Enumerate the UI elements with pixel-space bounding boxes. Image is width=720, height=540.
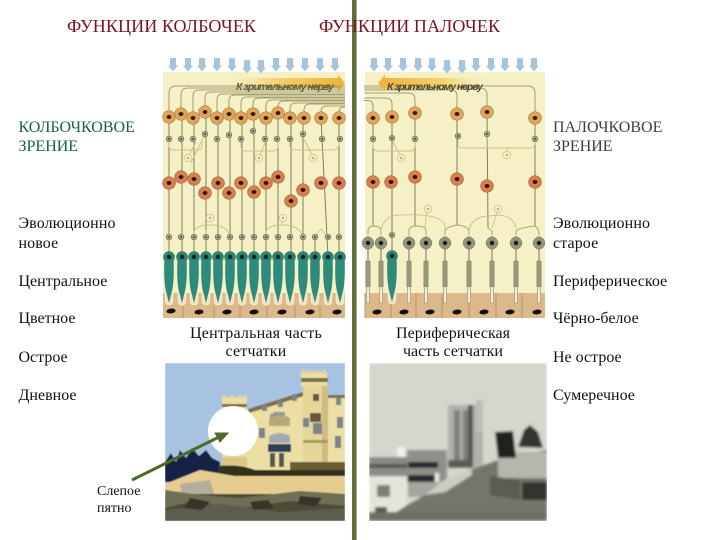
arrow: to optic nerve (cones): [225, 74, 345, 93]
photo: blurred monochrome periphery: [369, 363, 547, 521]
small amacrine cells row: cones: [166, 128, 343, 222]
text block: rod vision properties: Чёрно-белое: [553, 310, 639, 327]
ganglion cells: cones: [162, 106, 346, 124]
nerve fibres: cones: [169, 86, 345, 118]
amacrine links: rods: [373, 135, 535, 230]
text block: cone vision properties: Острое: [18, 349, 68, 366]
amacrine links: cones: [169, 134, 339, 237]
cone photoreceptors: [163, 251, 346, 305]
text block: cone vision properties: новое: [18, 234, 58, 252]
pigment epithelium: rods: [365, 293, 545, 318]
title: cones: ФУНКЦИИ КОЛБОЧЕК: [67, 16, 256, 36]
vertical axons: cones: [169, 112, 339, 257]
rod photoreceptors: [362, 236, 545, 304]
label: blind spot: пятно: [97, 501, 132, 516]
retina diagrams and photographs: [131, 0, 547, 540]
text block: cone vision properties: [18, 215, 116, 404]
arrow: to optic nerve (cones): К зрительному нерву: [236, 81, 335, 93]
caption: peripheral retina: часть сетчатки: [403, 343, 503, 360]
caption: peripheral retina: Периферическая: [396, 324, 510, 342]
text block: cone vision properties: Центральное: [18, 273, 107, 290]
text block: rod vision heading: [553, 119, 662, 155]
lower synapse row: cones: [166, 234, 342, 240]
rod bipolar branches: [368, 225, 539, 235]
label: blind spot: [97, 484, 140, 516]
text block: rod vision heading: ПАЛОЧКОВОЕ: [553, 119, 662, 136]
text block: rod vision heading: ЗРЕНИЕ: [553, 138, 613, 155]
caption: central retina: [190, 324, 322, 360]
text block: cone vision heading: ЗРЕНИЕ: [18, 138, 78, 155]
small cells: rods: [370, 131, 538, 238]
arrow: blind spot pointer: [132, 433, 228, 480]
pigment epithelium: cones: [163, 293, 345, 318]
arrow: to optic nerve (rods): [378, 74, 490, 93]
title: rods: ФУНКЦИИ ПАЛОЧЕК: [319, 16, 500, 36]
caption: central retina: Центральная часть: [190, 324, 322, 342]
panel: rod retina diagram: [362, 58, 545, 318]
ganglion cells: rods: [366, 106, 542, 124]
nerve fibres: rods: [364, 86, 535, 118]
text block: cone vision heading: КОЛБОЧКОВОЕ: [18, 119, 135, 136]
light arrows: rods: [369, 58, 539, 74]
text block: cone vision properties: Цветное: [18, 310, 75, 327]
caption: central retina: сетчатки: [225, 343, 287, 360]
text block: rod vision properties: [553, 215, 667, 404]
text block: rod vision properties: Эволюционно: [553, 215, 650, 232]
photo: sharp colour castle: [165, 363, 345, 521]
bipolar cells: cones: [162, 170, 346, 208]
central divider line: [352, 0, 357, 540]
text block: rod vision properties: Сумеречное: [553, 387, 635, 404]
text block: cone vision heading: [18, 119, 135, 155]
caption: peripheral retina: [396, 324, 510, 360]
text block: rod vision properties: Периферическое: [553, 273, 667, 290]
label: blind spot: Слепое: [97, 484, 140, 499]
light arrows: cones: [168, 58, 340, 74]
text block: cone vision properties: Эволюционно: [18, 215, 116, 232]
text block: rod vision properties: Не острое: [553, 349, 622, 366]
text block: cone vision properties: Дневное: [18, 387, 76, 404]
vertical axons: rods: [373, 112, 535, 256]
bipolar cells: rods: [366, 170, 542, 192]
panel: cone retina diagram: [162, 58, 346, 318]
arrow: to optic nerve (rods): К зрительному нерву: [387, 81, 484, 93]
text block: rod vision properties: старое: [553, 234, 598, 252]
